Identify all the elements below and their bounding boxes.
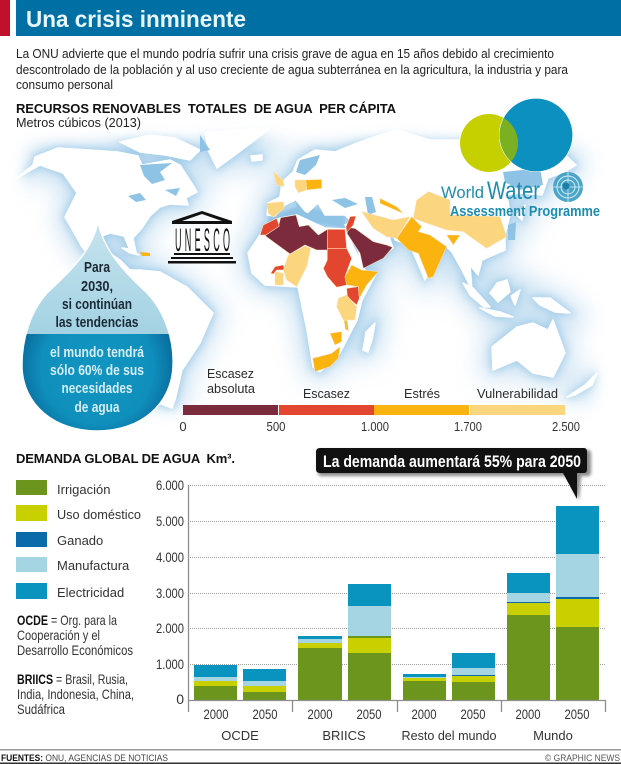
map legend: scale: Escasez — [303, 386, 350, 401]
x axis year labels: 2050 — [356, 707, 382, 722]
map legend: scale: Vulnerabilidad — [477, 386, 558, 401]
map heading: RECURSOS RENOVABLES TOTALES DE AGUA PER CÁPITA — [16, 101, 397, 116]
map legend: scale: absoluta — [207, 381, 256, 396]
drop text bottom: necesidades — [62, 380, 132, 397]
drop text top: si continúan — [62, 296, 132, 313]
definitions — [17, 612, 134, 717]
axes — [188, 485, 606, 712]
inland seas — [128, 135, 543, 240]
chart legend: Irrigación — [57, 482, 110, 497]
map legend: scale — [179, 366, 580, 434]
hispaniola — [140, 252, 150, 256]
x axis year labels: 2050 — [252, 707, 278, 722]
y axis labels: 0 — [176, 691, 184, 707]
x axis group labels: OCDE — [221, 728, 259, 743]
callout: demand increase — [316, 448, 591, 500]
chart legend: Uso doméstico — [57, 507, 141, 522]
footer: FUENTES: ONU, AGENCIAS DE NOTICIAS — [1, 753, 168, 763]
y axis labels — [156, 477, 184, 707]
logo: World Water Assessment Programme: World — [441, 183, 484, 202]
x axis year labels: 2000 — [308, 707, 332, 722]
definitions: BRIICS = Brasil, Rusia, — [17, 671, 128, 687]
x axis year labels: 2000 — [516, 707, 540, 722]
drop text bottom: sólo 60% de sus — [50, 362, 144, 379]
drop text bottom — [50, 344, 145, 416]
water drop callout — [22, 225, 172, 430]
vulnerability — [267, 172, 507, 331]
y axis labels: 1.000 — [156, 656, 184, 672]
x axis year labels: 2050 — [564, 707, 590, 722]
map legend: scale: 0 — [179, 419, 187, 434]
map legend: scale: 1.700 — [454, 419, 482, 434]
x axis year labels: 2050 — [460, 707, 486, 722]
bars: Resto del mundo — [403, 653, 495, 700]
drop text bottom: de agua — [74, 399, 120, 416]
drop text top: 2030, — [81, 278, 113, 295]
y axis labels: 3.000 — [156, 585, 184, 601]
intro text: descontrolado de la población y al uso creciente de agua subterránea en la agricultura, la industria y para — [16, 63, 568, 77]
intro text: consumo personal — [16, 78, 113, 92]
mediterranean and red sea — [268, 205, 362, 265]
map legend: scale: Escasez — [207, 366, 254, 381]
map legend: scale: Estrés — [404, 386, 440, 401]
stress — [306, 179, 460, 372]
intro text — [16, 47, 568, 92]
bar chart: global water demand — [156, 477, 606, 743]
chart legend: Manufactura — [57, 558, 130, 573]
chart legend — [16, 480, 141, 600]
x axis year labels — [204, 707, 590, 722]
x axis group labels: BRIICS — [322, 728, 366, 743]
footer — [0, 749, 621, 764]
y axis labels: 4.000 — [156, 549, 184, 565]
x axis year labels: 2000 — [204, 707, 228, 722]
intro text: La ONU advierte que el mundo podría sufrir una crisis grave de agua en 15 años debido al crecimiento — [16, 47, 554, 61]
drop text top: las tendencias — [56, 314, 138, 331]
scarcity — [260, 216, 359, 305]
map subheading: Metros cúbicos (2013) — [16, 115, 141, 130]
map legend: scale: 1.000 — [361, 419, 389, 434]
y axis labels: 2.000 — [156, 620, 184, 636]
chart legend: Ganado — [57, 533, 103, 548]
absolute scarcity — [265, 215, 393, 268]
chart legend: Electricidad — [57, 585, 124, 600]
map legend: scale: 500 — [266, 419, 286, 434]
x axis group labels: Resto del mundo — [402, 728, 496, 743]
drop text top: Para — [84, 259, 111, 276]
y axis labels: 6.000 — [156, 477, 184, 493]
icon: UN emblem — [553, 172, 583, 202]
demand heading: DEMANDA GLOBAL DE AGUA Km³. — [16, 451, 235, 466]
logo: UNESCO temple — [168, 211, 236, 264]
x axis group labels — [221, 728, 573, 743]
bars: BRIICS — [298, 584, 391, 700]
bars: OCDE — [194, 665, 286, 700]
map legend: scale: 2.500 — [552, 419, 580, 434]
definitions: OCDE = Org. para la — [17, 612, 117, 628]
definitions: Cooperación y el — [17, 627, 100, 643]
countries by water availability — [260, 172, 507, 372]
logo: UNESCO temple: UNESCO — [175, 222, 230, 259]
header bar — [0, 0, 621, 36]
landmasses — [17, 128, 597, 408]
drop text top — [56, 259, 138, 331]
map: world water resources — [17, 128, 597, 408]
logo: World Water Assessment Programme — [441, 98, 600, 220]
definitions: Desarrollo Económicos — [17, 642, 133, 658]
y axis labels: 5.000 — [156, 513, 184, 529]
logo: World Water Assessment Programme: Assessment Programme — [450, 203, 600, 220]
definitions: India, Indonesia, China, — [17, 686, 134, 702]
definitions: Sudáfrica — [17, 701, 65, 717]
logo: World Water Assessment Programme: Water — [487, 177, 540, 205]
x axis group labels: Mundo — [533, 728, 573, 743]
drop text bottom: el mundo tendrá — [50, 344, 145, 361]
bars: Mundo — [507, 506, 599, 700]
title: Una crisis inminente — [26, 6, 246, 32]
x axis year labels: 2000 — [412, 707, 436, 722]
